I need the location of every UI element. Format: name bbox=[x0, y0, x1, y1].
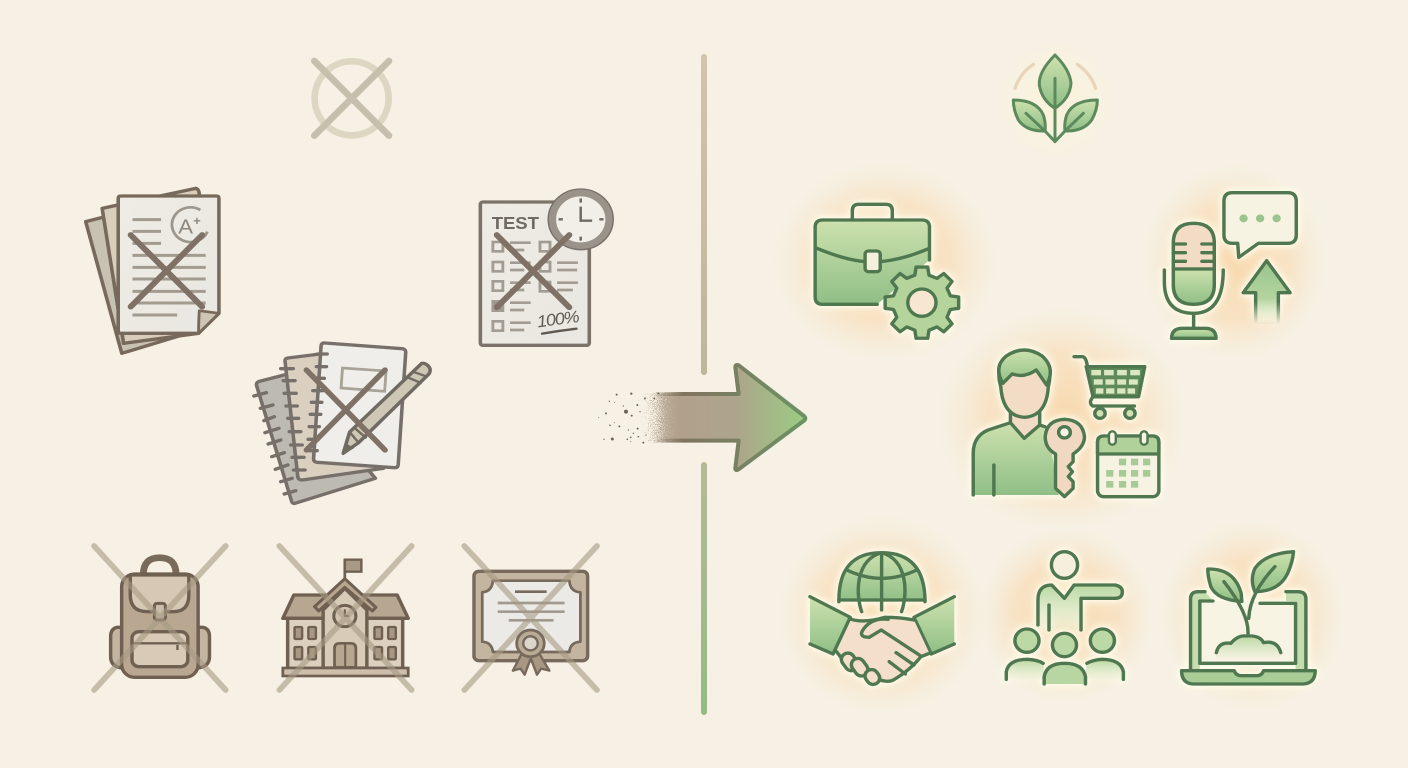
panel: orange glows behind skills bbox=[773, 38, 1344, 715]
icon: crossed graded papers bbox=[86, 188, 219, 353]
divider: bottom line bbox=[701, 462, 707, 715]
icon: person with key, cart and calendar bbox=[973, 350, 1159, 497]
arrow: dissolving into growth bbox=[598, 365, 805, 470]
icon: crossed diploma bbox=[464, 546, 597, 690]
icon: crossed test with clock bbox=[480, 189, 613, 345]
icon: leaf sprout bbox=[1013, 55, 1097, 142]
divider: top line bbox=[701, 54, 707, 375]
icon: laptop with growing plant bbox=[1182, 552, 1315, 684]
icon: crossed graded papers: A bbox=[178, 215, 194, 238]
icon: crossed graded papers: + bbox=[193, 214, 201, 228]
icon: microphone, speech bubble and up arrow bbox=[1164, 193, 1296, 338]
icon: crossed circle bbox=[314, 61, 389, 136]
icon: crossed test with clock: TEST bbox=[492, 214, 539, 233]
icon: crossed backpack bbox=[94, 546, 226, 690]
icon: briefcase with gear bbox=[815, 204, 959, 338]
icon: crossed notebooks and pencil bbox=[254, 343, 430, 503]
icon: handshake under globe bbox=[810, 553, 954, 687]
icon: crossed test with clock: 100% bbox=[536, 306, 581, 331]
icon: crossed school building bbox=[279, 546, 412, 690]
icon: presenter and audience bbox=[1006, 552, 1123, 684]
